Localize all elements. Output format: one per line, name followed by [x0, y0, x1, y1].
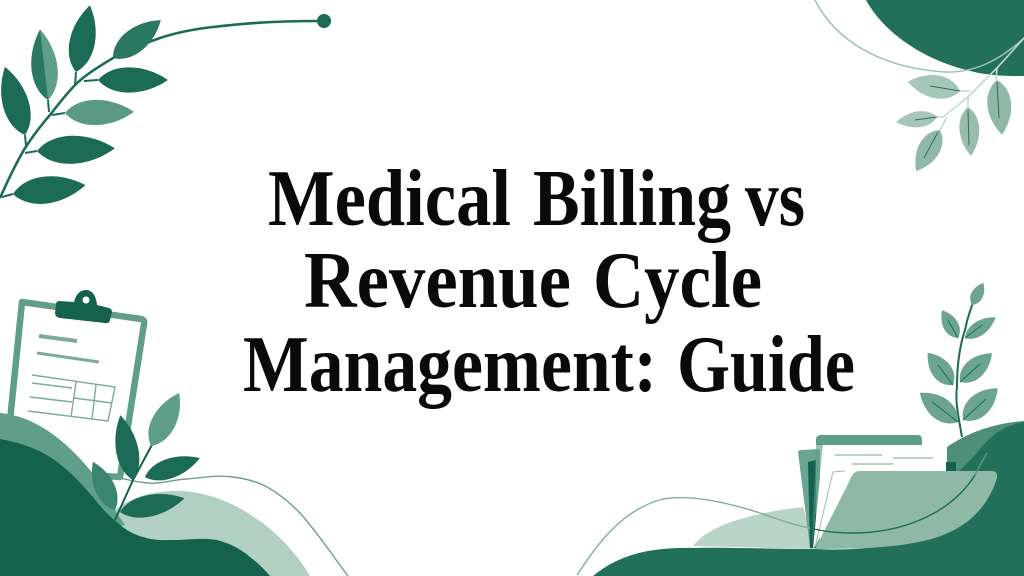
- title: Management:: [243, 319, 657, 409]
- mid-green wave: [947, 421, 1024, 480]
- title: vs: [745, 153, 805, 243]
- thin curve across folder: [577, 453, 987, 575]
- title: Medical: [268, 153, 511, 243]
- icon: top-right corner blob: [866, 0, 1024, 76]
- back tab: [798, 449, 820, 548]
- icon: top-right curve and pale leaves: [815, 0, 1024, 177]
- title: Revenue: [304, 235, 571, 325]
- icon: bottom-right plant: [913, 280, 1005, 437]
- mid-green wave: [0, 413, 125, 540]
- icon: clipboard: [5, 290, 144, 477]
- branch stem with end dot: [0, 14, 331, 198]
- title: Guide: [677, 319, 855, 409]
- title: Cycle: [593, 235, 762, 325]
- pale branch: [937, 38, 1024, 130]
- clip: [55, 290, 112, 323]
- title: [243, 153, 855, 409]
- pale leaves: [895, 70, 1014, 177]
- paper: [813, 445, 947, 549]
- thin curve: [815, 0, 1024, 72]
- pale wave: [693, 507, 815, 549]
- front: [815, 471, 997, 549]
- title: Billing: [533, 153, 731, 243]
- board: [5, 302, 144, 477]
- dark right wave: [945, 422, 1024, 549]
- dark wave: [0, 439, 270, 576]
- icon: folder: [798, 435, 997, 549]
- small dark notch: [946, 462, 956, 471]
- icon: bottom-left sprig: [84, 387, 203, 523]
- icon: top-left leafy branch: [0, 3, 331, 207]
- dark floor wave: [593, 500, 1024, 576]
- shape: bottom-right waves: [593, 421, 1024, 576]
- form lines: [28, 336, 115, 421]
- upper tab: [816, 435, 922, 445]
- paper lines: [835, 455, 933, 464]
- pale wave: [110, 491, 310, 576]
- shape: bottom-left blobs: [0, 413, 348, 576]
- leaves: [0, 3, 168, 207]
- dark inner: [808, 460, 816, 548]
- thin curve: [115, 476, 348, 576]
